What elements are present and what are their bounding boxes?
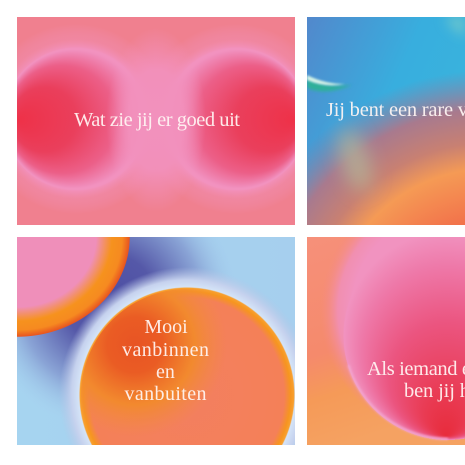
- heading: Jij bent een rare: Jij bent een rare v: [326, 99, 465, 121]
- heading: Mooi vanbinnen en vanbuiten: Mooi: [144, 316, 188, 338]
- heading: Mooi vanbinnen en vanbuiten: [122, 320, 209, 400]
- heading: Mooi vanbinnen en vanbuiten: vanbinnen: [122, 339, 209, 361]
- panel: Mooi vanbinnen en vanbuiten: [17, 237, 295, 445]
- heading: Mooi vanbinnen en vanbuiten: vanbuiten: [124, 383, 206, 405]
- heading: Wat zie jij er goed uit: Wat zie jij er goed uit: [74, 109, 240, 131]
- icon: orange circle: [79, 287, 295, 445]
- heading: Mooi vanbinnen en vanbuiten: en: [156, 361, 175, 383]
- panel: Als iemand: [307, 237, 465, 445]
- icon: pink circle: [17, 237, 130, 337]
- panel: Wat zie jij er goed uit: [17, 17, 295, 225]
- panel: Jij bent een rare: [307, 17, 465, 225]
